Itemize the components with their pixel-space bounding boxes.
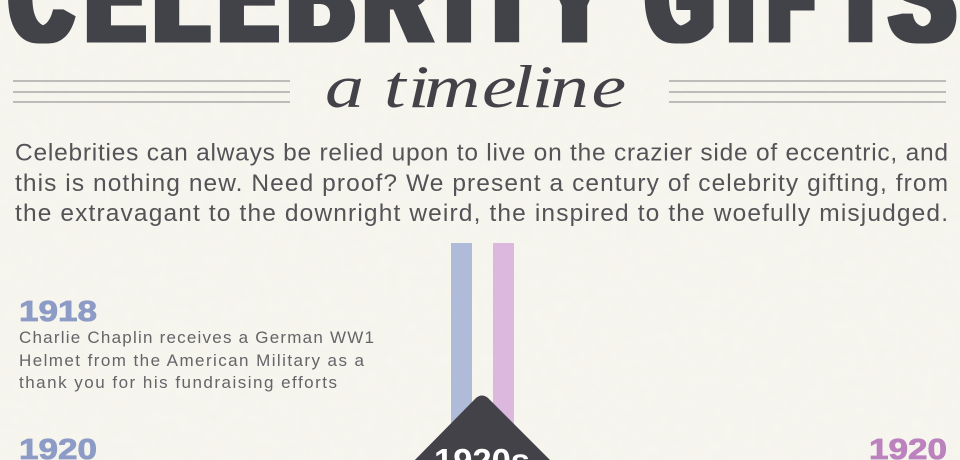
subtitle: atimeline — [325, 54, 626, 121]
entry: 1918: Charlie Chaplin receives a German WW1 — [19, 328, 374, 347]
right triple rule — [669, 81, 946, 102]
left triple rule — [13, 81, 290, 102]
entry: 1918: 1918 — [19, 296, 97, 328]
entry: 1918 — [19, 296, 374, 392]
intro paragraph: this is nothing new. Need proof? We present a century of celebrity gifting, from — [15, 170, 948, 197]
intro paragraph: Celebrities can always be relied upon to live on the crazier side of eccentric, and — [15, 140, 948, 166]
timeline bar: pink — [493, 243, 514, 433]
title — [11, 0, 954, 68]
intro paragraph — [15, 140, 948, 227]
1920s marker — [405, 396, 560, 460]
entry: 1918: thank you for his fundraising efforts — [19, 373, 337, 392]
intro paragraph: the extravagant to the downright weird, the inspired to the woefully misjudged. — [15, 200, 948, 227]
timeline bar: blue — [451, 243, 472, 433]
entry: 1918: Helmet from the American Military as a — [19, 351, 365, 370]
